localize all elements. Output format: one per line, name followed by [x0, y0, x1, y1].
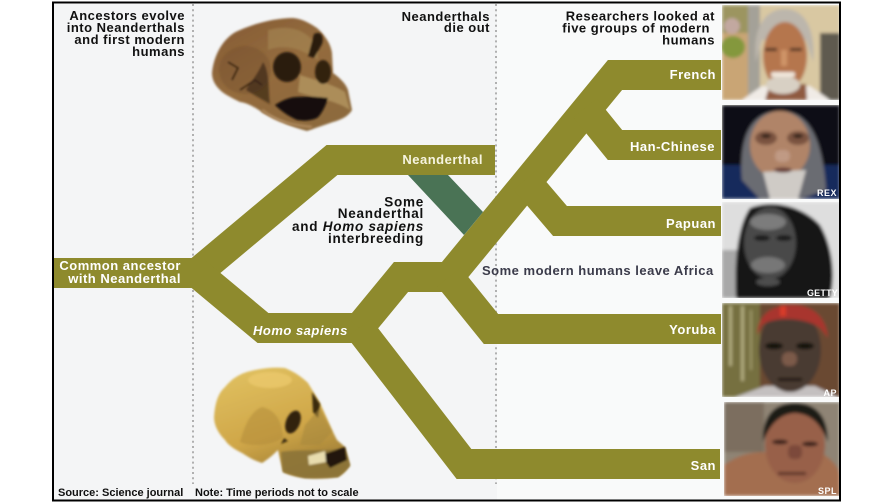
branch: Homo sapiens to French: [359, 75, 721, 328]
label: interbreeding: Neanderthal: [338, 206, 424, 221]
photo: Papuan man: [722, 202, 840, 298]
modern human skull: [214, 368, 350, 479]
branch: Papuan: [525, 180, 721, 221]
photo: San man: [724, 402, 840, 496]
label: interbreeding: and Homo sapiens: [292, 219, 424, 234]
interbreeding link: [408, 175, 483, 235]
label: Neanderthal: Neanderthal: [402, 152, 483, 167]
credit: SPL: SPL: [818, 486, 837, 496]
photo: Yoruba woman: [722, 303, 840, 398]
family tree branches: [54, 75, 721, 464]
label: leave Africa: Some modern humans leave Africa: [482, 263, 714, 278]
branch: common ancestor to Homo sapiens: [190, 273, 359, 328]
label: Yoruba: Yoruba: [669, 322, 716, 337]
label: interbreeding: Some: [384, 194, 424, 210]
source note: Source: Science journal: [58, 487, 183, 499]
credit: GETTY: GETTY: [807, 288, 838, 298]
credit: REX: REX: [817, 188, 837, 198]
label: Papuan: Papuan: [666, 216, 716, 231]
Neanderthal skull: [212, 18, 352, 131]
heading: ancestors evolve: and first modern: [74, 32, 185, 47]
heading: researchers: Researchers looked at: [566, 8, 715, 24]
heading: ancestors evolve: into Neanderthals: [67, 20, 185, 35]
label: common ancestor: Common ancestor: [59, 258, 181, 273]
branch: San: [359, 328, 720, 464]
heading: Neanderthals die out: Neanderthals: [402, 9, 490, 24]
branch: Han-Chinese: [585, 108, 721, 145]
heading: researchers: five groups of modern: [562, 20, 710, 36]
photo: Han-Chinese man: [722, 105, 840, 199]
scale note: Note: Time periods not to scale: [195, 487, 359, 499]
heading: ancestors evolve: Ancestors evolve: [69, 8, 185, 23]
branch: common ancestor to Neanderthal: [54, 160, 495, 273]
label: interbreeding: interbreeding: [328, 231, 424, 246]
label: Homo sapiens: Homo sapiens: [253, 323, 348, 338]
time period dividers: [193, 4, 496, 484]
label: Han-Chinese: Han-Chinese: [630, 139, 715, 154]
heading: ancestors evolve: humans: [132, 44, 185, 59]
credit: AP: AP: [823, 388, 837, 398]
label: French: French: [670, 67, 716, 82]
label: San: San: [691, 458, 716, 473]
photo: French man: [721, 5, 840, 100]
label: common ancestor: with Neanderthal: [67, 271, 181, 286]
heading: researchers: humans: [662, 32, 715, 48]
heading: Neanderthals die out: die out: [444, 20, 490, 35]
branch: Yoruba: [449, 277, 721, 329]
